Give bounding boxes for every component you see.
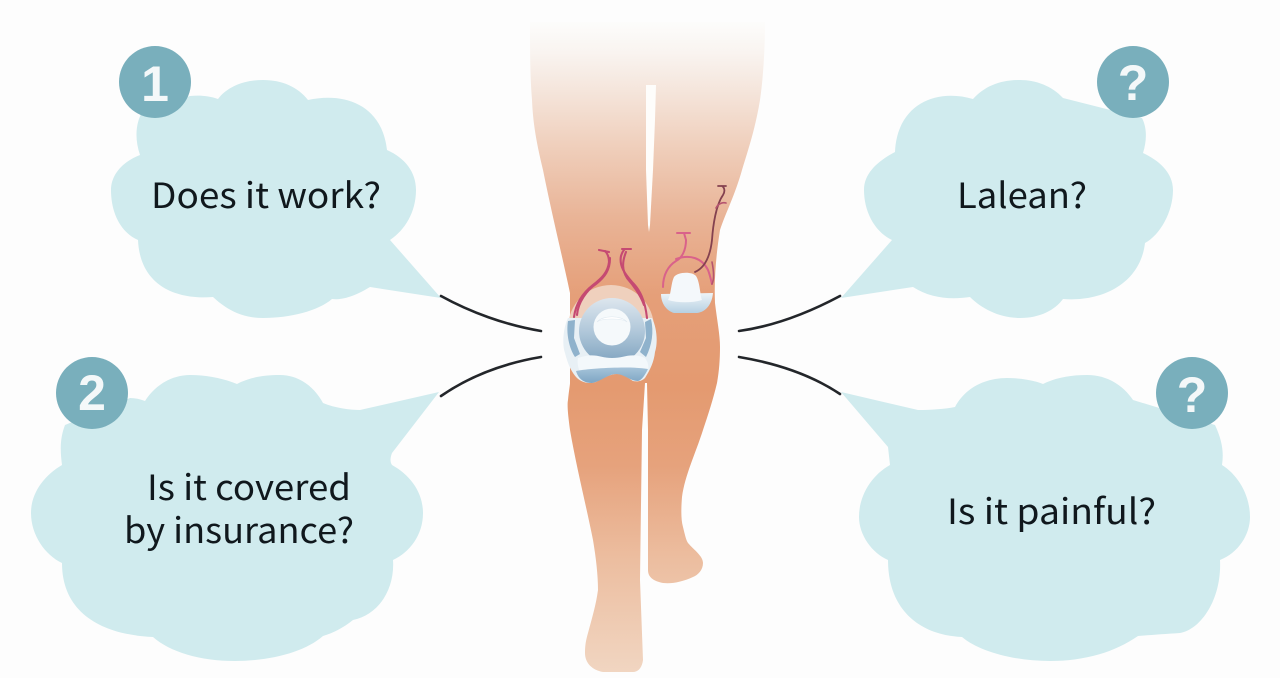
question: is it painful: Is it painful? (947, 484, 1156, 535)
knee device front (563, 285, 657, 383)
badge: question mark bottom right (1156, 357, 1228, 429)
cloud: does it work (111, 80, 441, 318)
question: does it work: Does it work? (151, 168, 381, 219)
badge: number 1 (119, 46, 191, 118)
question: is it covered by insurance (124, 460, 354, 554)
question: lalean: Lalean? (957, 168, 1087, 219)
badge: question mark top right (1097, 46, 1169, 118)
badge: question mark bottom right: ? (1177, 367, 1207, 423)
illustration: legs with knee device (530, 22, 765, 672)
legs silhouette (530, 22, 765, 672)
cloud: lalean (841, 80, 1173, 318)
badge: number 2 (56, 357, 128, 429)
thigh gap (646, 85, 656, 232)
badge: number 2: 2 (78, 365, 106, 421)
knee device back (661, 273, 713, 313)
cloud: is it covered by insurance (31, 375, 439, 661)
connector lines (441, 296, 840, 396)
badge: number 1: 1 (141, 56, 169, 112)
cloud: is it painful (841, 375, 1250, 661)
question: is it covered by insurance: by insurance? (124, 503, 354, 554)
question: is it covered by insurance: Is it covered (147, 460, 351, 511)
nerve lines back (663, 186, 726, 287)
nerve lines front (574, 249, 647, 318)
badge: question mark top right: ? (1118, 55, 1148, 111)
